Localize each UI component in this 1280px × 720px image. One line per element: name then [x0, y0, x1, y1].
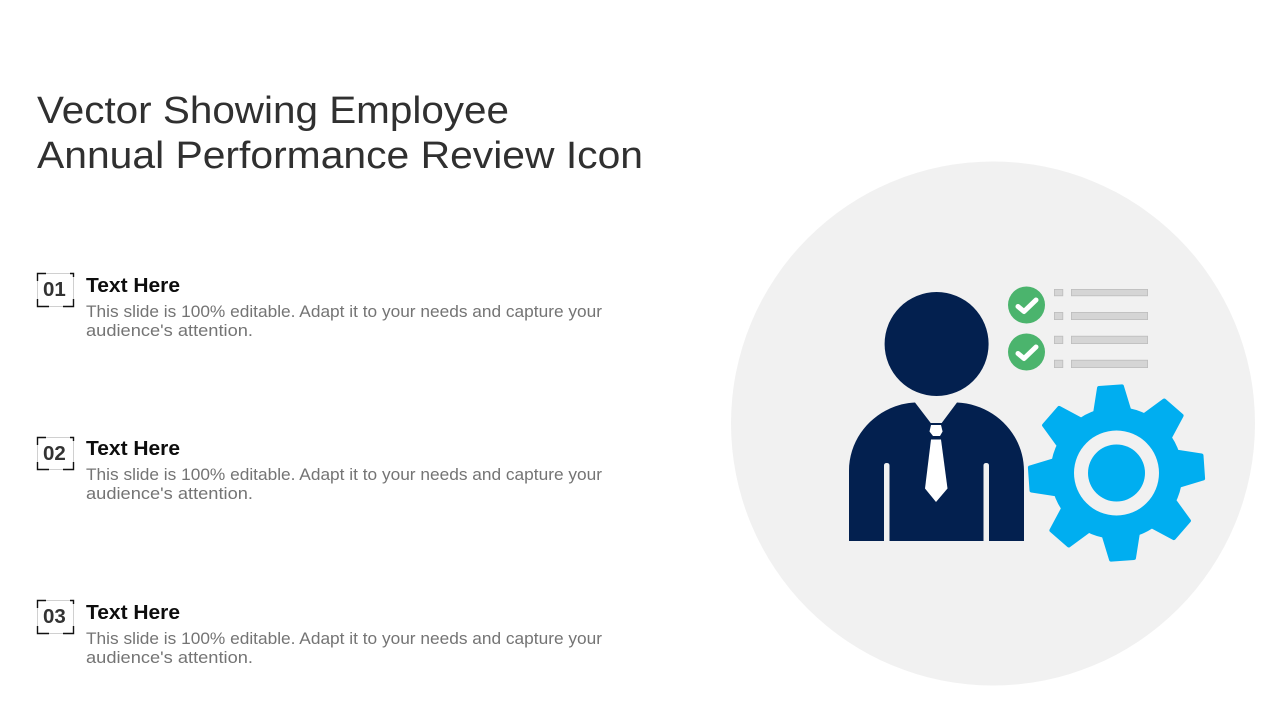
- check badge 2: [1008, 334, 1045, 370]
- body text 03: audience's attention.: [86, 649, 253, 667]
- left arm gap: [884, 463, 890, 541]
- body text 01: audience's attention.: [86, 322, 253, 340]
- number badge 01: 01: [43, 278, 66, 301]
- number badge 03: 03: [43, 605, 66, 628]
- item 03: [38, 600, 603, 667]
- background circle: [731, 162, 1255, 686]
- icon: gear: [1030, 386, 1203, 560]
- icon: employee: [849, 292, 1024, 541]
- list lines: [1054, 289, 1148, 368]
- number badge 01: [38, 274, 74, 306]
- check badge 1: [1008, 286, 1045, 324]
- number badge 02: [38, 438, 74, 470]
- body text 03: [86, 630, 603, 667]
- body text 02: [86, 466, 603, 503]
- heading 03: Text Here: [86, 602, 180, 624]
- item 01: [38, 274, 603, 340]
- title: [37, 90, 643, 177]
- heading 02: Text Here: [86, 438, 180, 460]
- title: Vector Showing Employee: [37, 90, 509, 132]
- body text 01: [86, 303, 603, 340]
- torso: [849, 402, 1024, 541]
- right arm gap: [984, 463, 989, 541]
- number badge 02: 02: [43, 442, 66, 465]
- item 02: [38, 438, 603, 503]
- body text 01: This slide is 100% editable. Adapt it to your needs and capture your: [86, 303, 603, 321]
- head: [885, 292, 989, 396]
- tie: [925, 425, 948, 502]
- body text 02: This slide is 100% editable. Adapt it to your needs and capture your: [86, 466, 603, 484]
- heading 01: Text Here: [86, 275, 180, 297]
- icon: checklist: [1008, 286, 1148, 370]
- body text 02: audience's attention.: [86, 485, 253, 503]
- body text 03: This slide is 100% editable. Adapt it to your needs and capture your: [86, 630, 603, 648]
- title: Annual Performance Review Icon: [37, 135, 643, 177]
- number badge 03: [38, 600, 74, 634]
